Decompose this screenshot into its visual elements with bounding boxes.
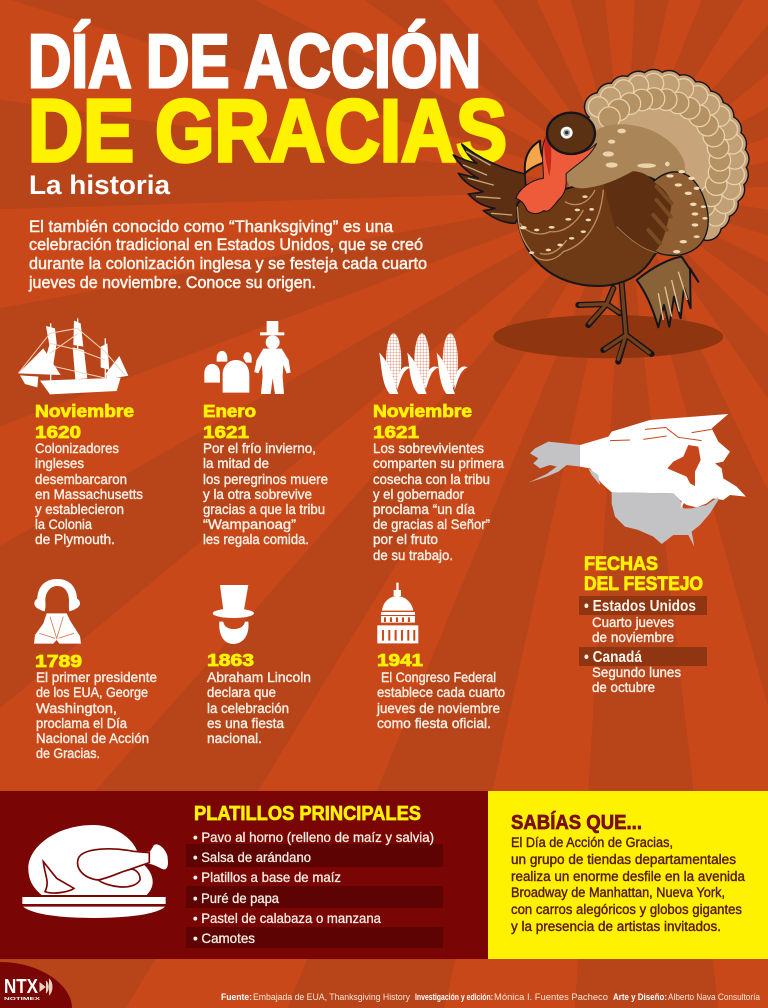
heading: Enero 1621: [203, 401, 256, 442]
text: 1789: El primer presidente: [36, 669, 157, 685]
turkey head: [547, 113, 595, 154]
text: January 1621: Por el frío invierno,: [203, 440, 316, 456]
text: 1863: es una fiesta: [207, 715, 284, 731]
text: 1789: de Gracias.: [36, 745, 100, 761]
text: 1863: Abraham Lincoln: [207, 669, 311, 685]
turkey beak: [525, 141, 545, 173]
intro paragraph: durante la colonización inglesa y se festeja cada cuarto: [29, 255, 427, 273]
text: 1789: Nacional de Acción: [36, 730, 149, 746]
text: January 1621: la mitad de: [203, 455, 269, 471]
title: DÍA DE ACCIÓN: [28, 19, 481, 103]
subtitle: La historia: [29, 170, 171, 200]
turkey body: [517, 174, 668, 286]
text: 1941: establece cada cuarto: [377, 684, 505, 700]
text: parade fact: Broadway de Manhattan, Nueva York,: [511, 885, 725, 900]
text: November 1621: comparten su primera: [373, 455, 504, 471]
icon: roast turkey on platter: [22, 825, 168, 918]
text: 1941: jueves de noviembre: [376, 700, 500, 716]
turkey ground shadow: [493, 315, 723, 358]
text: parade fact: [511, 835, 745, 934]
icon: Abraham Lincoln: [213, 585, 254, 644]
text: fourth Thursday: Cuarto jueves: [592, 614, 674, 630]
icon: George Washington: [34, 579, 81, 644]
turkey breast feathers: [517, 190, 603, 260]
text: fourth Thursday: de noviembre: [592, 629, 674, 645]
text: November 1621: cosecha con la tribu: [373, 471, 490, 487]
icon: ship: [18, 318, 128, 394]
text: fourth Thursday: [592, 614, 674, 645]
text: parade fact: un grupo de tiendas departamentales: [511, 852, 736, 867]
text: 1789: Washington,: [36, 700, 117, 716]
intro paragraph: El también conocido como “Thanksgiving” es una: [29, 218, 394, 236]
credits: Investigación y edición:: [415, 992, 493, 1002]
list of dishes: • Platillos a base de maíz: [193, 869, 341, 885]
text: November 1620: Colonizadores: [35, 440, 119, 456]
logo: NTX Notimex: NTX: [4, 976, 39, 998]
turkey legs: [578, 283, 652, 362]
title: DE GRACIAS: [28, 81, 507, 180]
panel: January 1621: [203, 321, 328, 547]
credits: Arte y Diseño:: [613, 992, 667, 1002]
icon: corn: [379, 333, 468, 394]
heading: Noviembre 1621: Noviembre: [373, 401, 472, 421]
heading: Noviembre 1620: Noviembre: [35, 401, 134, 421]
text: January 1621: les regala comida.: [203, 531, 309, 547]
heading: Noviembre 1620: [35, 401, 134, 442]
panel: dates of the festivity: [579, 554, 707, 695]
text: 1863: nacional.: [207, 730, 262, 746]
logo: NTX Notimex: NOTIMEX: [4, 996, 40, 1001]
text: 1941: como fiesta oficial.: [377, 715, 491, 731]
text: January 1621: los peregrinos muere: [203, 471, 328, 487]
heading: Noviembre 1621: 1621: [373, 422, 419, 442]
text: 1863: la celebración: [207, 700, 289, 716]
list of dishes: • Pastel de calabaza o manzana: [193, 910, 381, 926]
text: November 1620: ingleses: [35, 455, 84, 471]
turkey neck: [566, 124, 685, 188]
turkey right wing scales: [647, 170, 708, 255]
text: 1789: [36, 669, 157, 761]
heading: Enero 1621: 1621: [203, 422, 249, 442]
text: November 1620: desembarcaron: [35, 471, 127, 487]
credits: Mónica I. Fuentes Pacheco: [494, 992, 608, 1002]
text: November 1621: de gracias al Señor”: [373, 516, 490, 532]
text: November 1620: de Plymouth.: [35, 531, 115, 547]
text: parade fact: con carros alegóricos y globos gigantes: [511, 902, 742, 917]
text: parade fact: realiza un enorme desfile en la avenida: [511, 869, 745, 884]
text: parade fact: El Día de Acción de Gracias,: [511, 835, 673, 850]
text: January 1621: y la otra sobrevive: [203, 486, 312, 502]
heading: Noviembre 1621: [373, 401, 472, 442]
heading: Noviembre 1620: 1620: [35, 422, 81, 442]
panel: 1941: [376, 583, 505, 731]
turkey wattle: [516, 133, 597, 214]
credits: Alberto Nava Consultoría: [668, 992, 760, 1002]
list of dishes: [193, 829, 434, 946]
turkey lower tail: [637, 257, 698, 327]
year: 1789: 1789: [35, 651, 82, 671]
text: second Monday: de octubre: [592, 679, 655, 695]
year: 1863: 1863: [207, 650, 254, 670]
map: North America: [528, 414, 746, 547]
text: 1789: proclama el Día: [36, 715, 127, 731]
heading: Fechas del festejo: FECHAS: [584, 554, 658, 575]
list of dishes: • Salsa de arándano: [193, 849, 311, 865]
label: Canadá: • Canadá: [584, 649, 642, 666]
panel: did you know: [488, 791, 768, 959]
turkey tail fan: [569, 69, 750, 244]
list of dishes: • Puré de papa: [193, 890, 279, 906]
panel: main dishes: [0, 791, 488, 959]
turkey left tail feathers: [453, 144, 527, 223]
intro paragraph: celebración tradicional en Estados Unidos, que se creó: [29, 236, 423, 254]
text: January 1621: [203, 440, 328, 547]
text: November 1620: y establecieron: [35, 501, 124, 517]
text: second Monday: Segundo lunes: [592, 664, 681, 680]
text: November 1621: Los sobrevivientes: [373, 440, 484, 456]
text: 1789: de los EUA, George: [36, 684, 148, 700]
list of dishes: • Camotes: [193, 930, 255, 946]
panel: November 1620: [18, 318, 143, 547]
intro paragraph: jueves de noviembre. Conoce su origen.: [28, 274, 316, 292]
heading: Fechas del festejo: DEL FESTEJO: [584, 574, 703, 595]
text: November 1621: de su trabajo.: [373, 547, 453, 563]
year: 1941: 1941: [377, 650, 423, 670]
text: November 1620: en Massachusetts: [35, 486, 143, 502]
text: 1941: El Congreso Federal: [381, 669, 496, 685]
panel: 1863: [207, 585, 311, 746]
list of dishes: • Pavo al horno (relleno de maíz y salvia): [193, 829, 434, 845]
text: November 1620: la Colonia: [35, 516, 92, 532]
heading: Platillos principales: PLATILLOS PRINCIPALES: [194, 803, 421, 825]
text: 1863: declara que: [207, 684, 276, 700]
heading: Fechas del festejo: [584, 554, 703, 595]
list bars: [186, 844, 443, 948]
text: January 1621: gracias a que la tribu: [203, 501, 325, 517]
text: 1863: [207, 669, 311, 746]
label: Estados Unidos: • Estados Unidos: [584, 598, 696, 615]
text: 1941: [376, 669, 505, 731]
panel: November 1621: [373, 333, 504, 563]
bar: Canadá: [579, 647, 707, 666]
text: November 1621: y el gobernador: [373, 486, 464, 502]
credits: [221, 992, 760, 1002]
text: November 1621: proclama “un día: [373, 501, 475, 517]
text: November 1621: [373, 440, 504, 563]
credits: Fuente:: [221, 992, 252, 1002]
logo: NTX Notimex: [0, 962, 72, 1008]
intro paragraph: [28, 218, 427, 292]
credits: Embajada de EUA, Thanksgiving History: [253, 992, 410, 1002]
icon: turkey illustration: [453, 69, 750, 362]
panel: 1789: [34, 579, 157, 761]
heading: Sabías que: SABÍAS QUE...: [511, 811, 642, 834]
text: second Monday: [592, 664, 681, 695]
text: January 1621: “Wampanoag”: [203, 516, 296, 532]
heading: Enero 1621: Enero: [203, 401, 256, 421]
turkey dark wing: [603, 171, 672, 253]
icon: pilgrim and graves: [204, 321, 291, 394]
text: November 1620: [35, 440, 143, 547]
bar: Estados Unidos: [579, 596, 707, 615]
icon: Capitol: [377, 583, 418, 643]
text: parade fact: y la presencia de artistas invitados.: [511, 919, 721, 934]
title: [28, 19, 507, 180]
text: November 1621: por el fruto: [373, 531, 438, 547]
